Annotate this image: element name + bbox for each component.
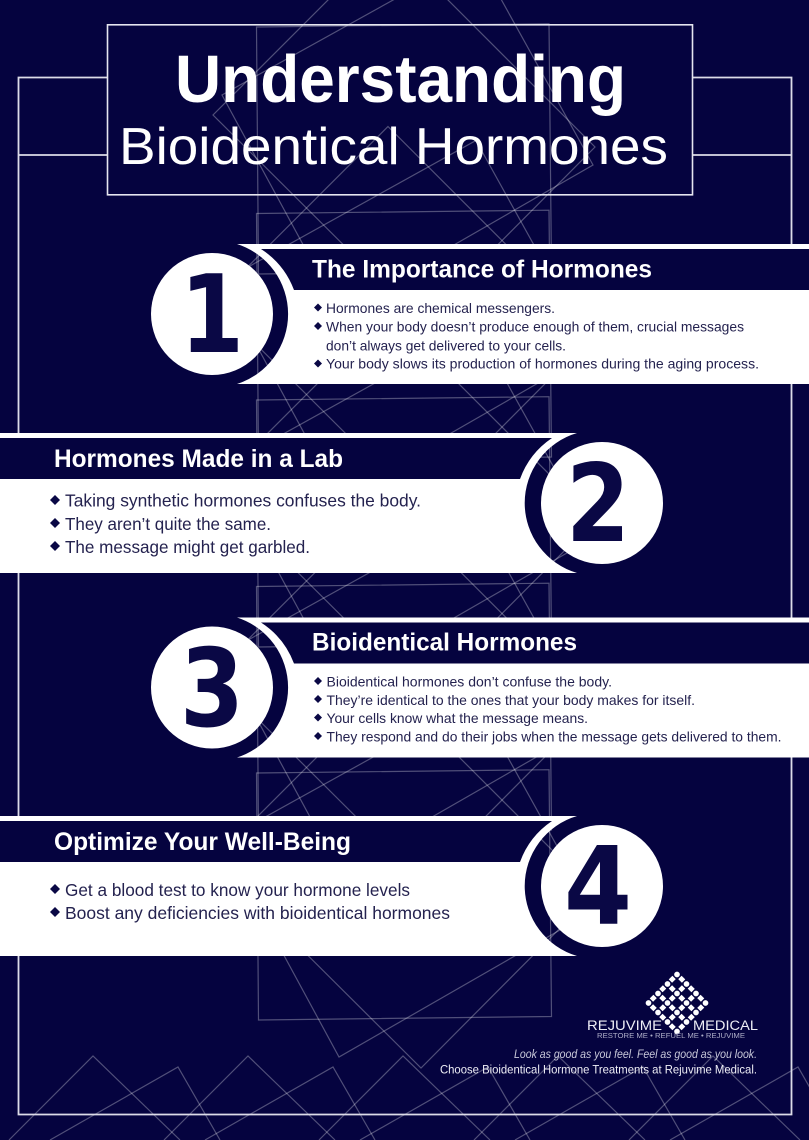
panel: 2 hormones made in a lab (0, 433, 663, 573)
panel 4 number badge (541, 825, 663, 950)
panel: 3 bioidentical hormones (151, 618, 809, 758)
panel 3 number badge (151, 626, 273, 752)
panel 2 bullet list: They aren’t quite the same. (65, 514, 271, 534)
tagline call to action: Choose Bioidentical Hormone Treatments at Rejuvime Medical. (440, 1062, 757, 1076)
panel 4 number badge: 4 (564, 825, 632, 950)
closing tagline (440, 1047, 757, 1076)
panel 2 bullet list (50, 491, 421, 557)
panel 1 bullet list (314, 300, 759, 372)
panel 1 bullet list: When your body doesn’t produce enough of them, crucial messages (326, 319, 744, 335)
panel 1 bullet list: don’t always get delivered to your cells. (326, 338, 566, 354)
panel 2 heading: Hormones Made in a Lab (54, 445, 343, 473)
panel 4 heading: Optimize Your Well-Being (54, 828, 351, 856)
logo: rejuvime medical (587, 972, 759, 1040)
title (108, 25, 692, 195)
panel 3 bullet list: Bioidentical hormones don’t confuse the body. (326, 674, 612, 690)
title box (108, 25, 692, 195)
logo tagline: RESTORE ME • REFUEL ME • REJUVIME (597, 1031, 745, 1040)
panel 1 number badge: 1 (180, 253, 244, 378)
panel 4 bullet list: Boost any deficiencies with bioidentical hormones (65, 903, 450, 923)
panel 3 bullet list (314, 674, 782, 745)
logo wordmark left: REJUVIME (587, 1018, 662, 1033)
panel 3 bullet list: They’re identical to the ones that your body makes for itself. (326, 692, 695, 708)
panel 2 header bar (0, 438, 552, 479)
panel 2 bullet list: The message might get garbled. (65, 537, 310, 557)
icon: logo lattice (646, 972, 708, 1034)
panel 3 header bar (261, 622, 809, 664)
title line 2: Bioidentical Hormones (119, 118, 668, 176)
panel 1 header bar (261, 249, 809, 290)
logo wordmark right: MEDICAL (693, 1018, 759, 1033)
panel 1 white ribbon (237, 244, 809, 384)
panel 3 heading: Bioidentical Hormones (312, 628, 577, 656)
panel: 4 optimize your well-being (0, 816, 663, 956)
title line 1: Understanding (175, 42, 626, 117)
panel 3 number badge: 3 (180, 627, 244, 752)
panel 3 white ribbon (237, 618, 809, 758)
panel 4 bullet list: Get a blood test to know your hormone levels (65, 880, 410, 900)
panel 4 white ribbon (0, 816, 577, 956)
panel 1 heading: The Importance of Hormones (312, 256, 652, 284)
panel: 1 the importance of hormones (151, 244, 809, 384)
panel 2 bullet list: Taking synthetic hormones confuses the body. (65, 491, 421, 511)
panel 4 bullet list (50, 880, 450, 923)
panel 2 number badge: 2 (566, 442, 630, 567)
panel 4 header bar (0, 821, 552, 862)
panel 3 bullet list: They respond and do their jobs when the message gets delivered to them. (326, 729, 782, 745)
tagline italic: Look as good as you feel. Feel as good as you look. (514, 1047, 757, 1061)
panel 1 bullet list: Hormones are chemical messengers. (326, 300, 555, 316)
panel 3 bullet list: Your cells know what the message means. (326, 710, 588, 726)
panel 2 number badge (541, 442, 663, 567)
panel 1 number badge (151, 253, 273, 378)
panel 2 white ribbon (0, 433, 577, 573)
panel 1 bullet list: Your body slows its production of hormones during the aging process. (326, 356, 759, 372)
